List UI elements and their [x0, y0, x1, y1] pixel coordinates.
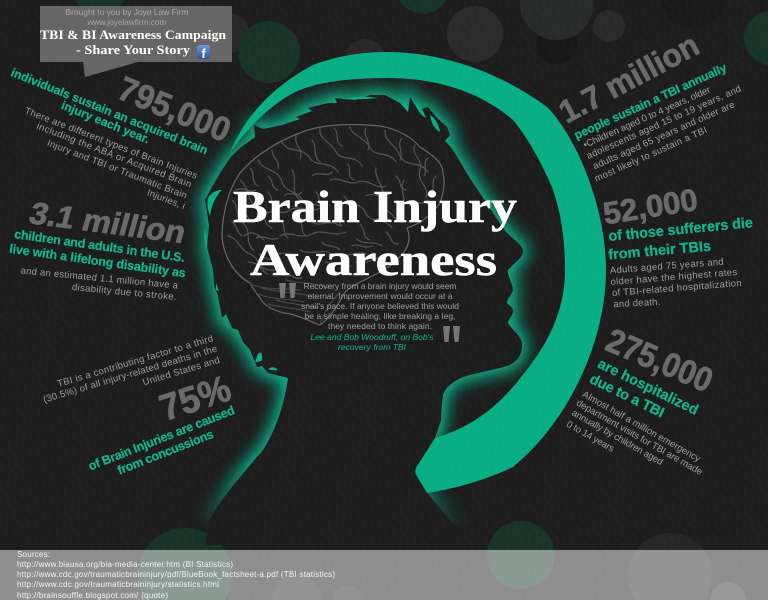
quote text: be a simple healing, like breaking a leg,	[304, 311, 456, 321]
header callout	[40, 6, 232, 77]
stat: 75%	[42, 333, 237, 477]
body text: There are different types of Brain Injuries	[23, 106, 199, 182]
body text: United States and	[141, 355, 221, 388]
green ring around the head	[230, 52, 606, 493]
body text: and death.	[613, 297, 661, 310]
stat: 275,000	[564, 322, 718, 478]
quote attribution: recovery from TBI	[338, 342, 407, 352]
green subtitle: from concussions	[116, 427, 216, 477]
body text: Injury and TBI or Traumatic Brain	[45, 138, 188, 201]
callout box	[40, 6, 232, 77]
green subtitle: are hospitalized	[595, 356, 701, 419]
quote text: eternal. Improvement would occur at a	[308, 291, 453, 301]
title: Awareness	[250, 235, 497, 285]
body text: adults aged 65 years and older are	[591, 99, 737, 172]
sources list: Sources:	[17, 550, 50, 559]
stat: 52,000	[601, 182, 754, 310]
head silhouette glow	[205, 95, 523, 545]
body text: (30.5%) of all injury-related deaths in the	[42, 344, 219, 406]
quote text: snail's pace. If anyone believed this would	[301, 301, 459, 311]
quote block	[279, 281, 460, 352]
quote text: Recovery from a brain injury would seem	[304, 281, 456, 291]
sources footer	[0, 550, 768, 600]
body text: most likely to sustain a TBI	[593, 125, 709, 185]
icon: facebook: f	[201, 46, 206, 61]
body text: 0 to 14 years	[564, 419, 616, 455]
sources list	[17, 550, 335, 600]
sources list: http://brainsouffle.blogspot.com/ (quote)	[17, 591, 168, 600]
green subtitle: of Brain Injuries are caused	[86, 403, 237, 473]
body text: annually by children aged	[570, 408, 665, 468]
closing quote mark	[443, 326, 460, 342]
body text: of TBI-related hospitalization	[612, 278, 742, 299]
green subtitle: of those sufferers die	[608, 215, 754, 245]
title	[233, 182, 518, 285]
quote text: they needed to think again.	[328, 321, 432, 331]
body text: adolescents aged 15 to 19 years, and	[585, 84, 743, 162]
campaign heading: TBI & BI Awareness Campaign	[40, 27, 227, 42]
body text: disability due to stroke.	[71, 282, 177, 303]
stat: 1.7 million	[553, 26, 743, 185]
body text: Adults aged 75 years and	[610, 257, 724, 276]
number: 275,000	[600, 322, 718, 400]
body text: department visits for TBI are made	[574, 398, 704, 478]
sources list: http://www.cdc.gov/traumaticbraininjury/pdf/BlueBook_factsheet-a.pdf (TBI statistics)	[17, 570, 335, 579]
green subtitle	[608, 215, 754, 263]
number: 1.7 million	[553, 26, 705, 130]
green subtitle: due to a TBI	[587, 371, 667, 421]
body text	[20, 265, 179, 303]
brain illustration	[222, 125, 444, 325]
sources list: http://www.cdc.gov/traumaticbraininjury/statistics.html	[17, 580, 219, 589]
stat: 795,000	[9, 65, 236, 212]
opening quote mark	[279, 283, 296, 298]
body text: Injuries, i	[145, 187, 187, 212]
sources list: http://www.biausa.org/bia-media-center.htm (BI Statistics)	[17, 560, 233, 569]
body text: older have the highest rates	[610, 267, 738, 288]
website line: www.joyelawfirm.com	[86, 17, 166, 27]
green subtitle: injury each year.	[59, 98, 152, 146]
green subtitle: live with a lifelong disability as	[8, 242, 187, 280]
green subtitle: individuals sustain an acquired brain	[9, 65, 210, 157]
body text	[610, 257, 742, 310]
number: 3.1 million	[26, 196, 190, 250]
number: 52,000	[601, 182, 700, 231]
green subtitle: from their TBIs	[608, 239, 712, 263]
footer bar	[0, 550, 768, 600]
body text: and an estimated 1.1 million have a	[20, 265, 179, 292]
body text: •Children aged 0 to 4 years, older	[582, 85, 712, 151]
number: 75%	[155, 367, 236, 429]
head silhouette	[204, 95, 523, 545]
title: Brain Injury	[233, 182, 518, 232]
campaign heading: - Share Your Story	[76, 42, 191, 57]
body text: including the ABA or Acquired Brain	[35, 121, 193, 190]
quote attribution	[310, 332, 434, 352]
credit line: Brought to you by Joye Law Firm	[66, 7, 188, 17]
icon: facebook	[197, 45, 210, 61]
number: 795,000	[112, 70, 236, 150]
campaign heading	[40, 27, 227, 57]
body text: Almost half a million emergency	[580, 389, 702, 465]
quote attribution: Lee and Bob Woodruff, on Bob's	[310, 332, 434, 342]
green subtitle: people sustain a TBI annually	[572, 60, 729, 142]
stat: 3.1 million	[8, 196, 190, 303]
green subtitle: children and adults in the U.S.	[13, 227, 186, 265]
body text: TBI is a contributing factor to a third	[56, 333, 215, 390]
quote text	[301, 281, 459, 331]
